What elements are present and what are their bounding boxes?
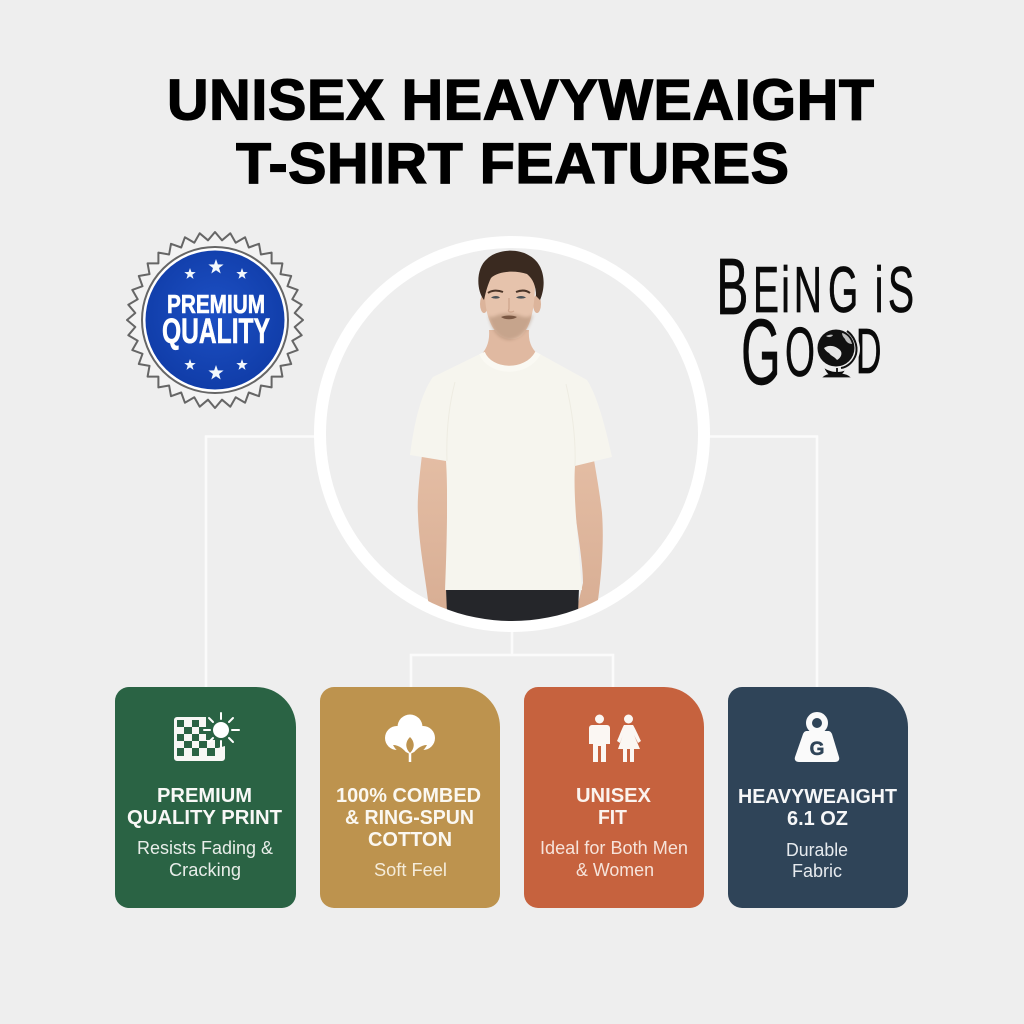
card: combed ring-spun cotton xyxy=(320,687,500,908)
card text: PREMIUM xyxy=(157,785,252,807)
card text xyxy=(738,786,897,881)
logo: being is good: B xyxy=(716,241,748,331)
card text: Cracking xyxy=(169,860,241,880)
card text: Fabric xyxy=(792,861,842,881)
title: T-SHIRT FEATURES xyxy=(236,132,789,196)
logo: being is good: O xyxy=(785,313,815,391)
card text: QUALITY PRINT xyxy=(127,807,282,829)
product photo circle xyxy=(320,242,704,640)
arms xyxy=(418,455,603,613)
card text: 100% COMBED xyxy=(336,785,481,807)
title xyxy=(167,68,874,196)
card text: COTTON xyxy=(368,829,452,851)
logo: being is good: D xyxy=(856,315,881,387)
logo: being is good xyxy=(716,241,914,404)
logo: being is good: O xyxy=(820,313,850,391)
title: UNISEX HEAVYWEAIGHT xyxy=(167,68,874,132)
card: unisex fit xyxy=(524,687,704,908)
card text: UNISEX xyxy=(576,785,652,807)
neck xyxy=(482,330,536,366)
card text: Soft Feel xyxy=(374,860,447,880)
icon: checker print and sun xyxy=(174,713,239,761)
illustration: model wearing t-shirt xyxy=(418,250,603,621)
icon: weight: G xyxy=(810,739,824,760)
logo: being is good: i xyxy=(875,254,883,327)
card text: 6.1 OZ xyxy=(787,808,848,830)
trousers xyxy=(446,590,579,621)
logo: being is good: S xyxy=(888,254,914,327)
icon: globe xyxy=(814,326,860,376)
icon: man and woman xyxy=(589,714,641,762)
icon: cotton boll xyxy=(385,714,435,762)
logo: being is good: N xyxy=(794,254,822,327)
card text: Ideal for Both Men xyxy=(540,838,688,858)
card text: Resists Fading & xyxy=(137,838,273,858)
icon: weight xyxy=(795,715,839,762)
card text xyxy=(127,785,282,880)
logo: being is good: E xyxy=(753,254,779,327)
t-shirt xyxy=(422,356,594,590)
logo: being is good: G xyxy=(828,254,858,327)
card: premium quality print xyxy=(115,687,296,908)
card text: & RING-SPUN xyxy=(345,807,474,829)
card text: & Women xyxy=(576,860,654,880)
head xyxy=(478,251,544,340)
logo: being is good: G xyxy=(741,300,781,404)
badge: premium quality: PREMIUM xyxy=(167,289,265,319)
connector lines xyxy=(206,436,817,687)
card: heavyweight 6.1 oz xyxy=(728,687,908,908)
card text xyxy=(336,785,481,880)
badge: premium quality xyxy=(127,232,303,408)
card text: HEAVYWEAIGHT xyxy=(738,786,897,808)
badge: premium quality: QUALITY xyxy=(162,312,270,351)
card text xyxy=(540,785,688,880)
card text: FIT xyxy=(598,807,627,829)
logo: being is good: i xyxy=(781,254,790,327)
card text: Durable xyxy=(786,840,848,860)
